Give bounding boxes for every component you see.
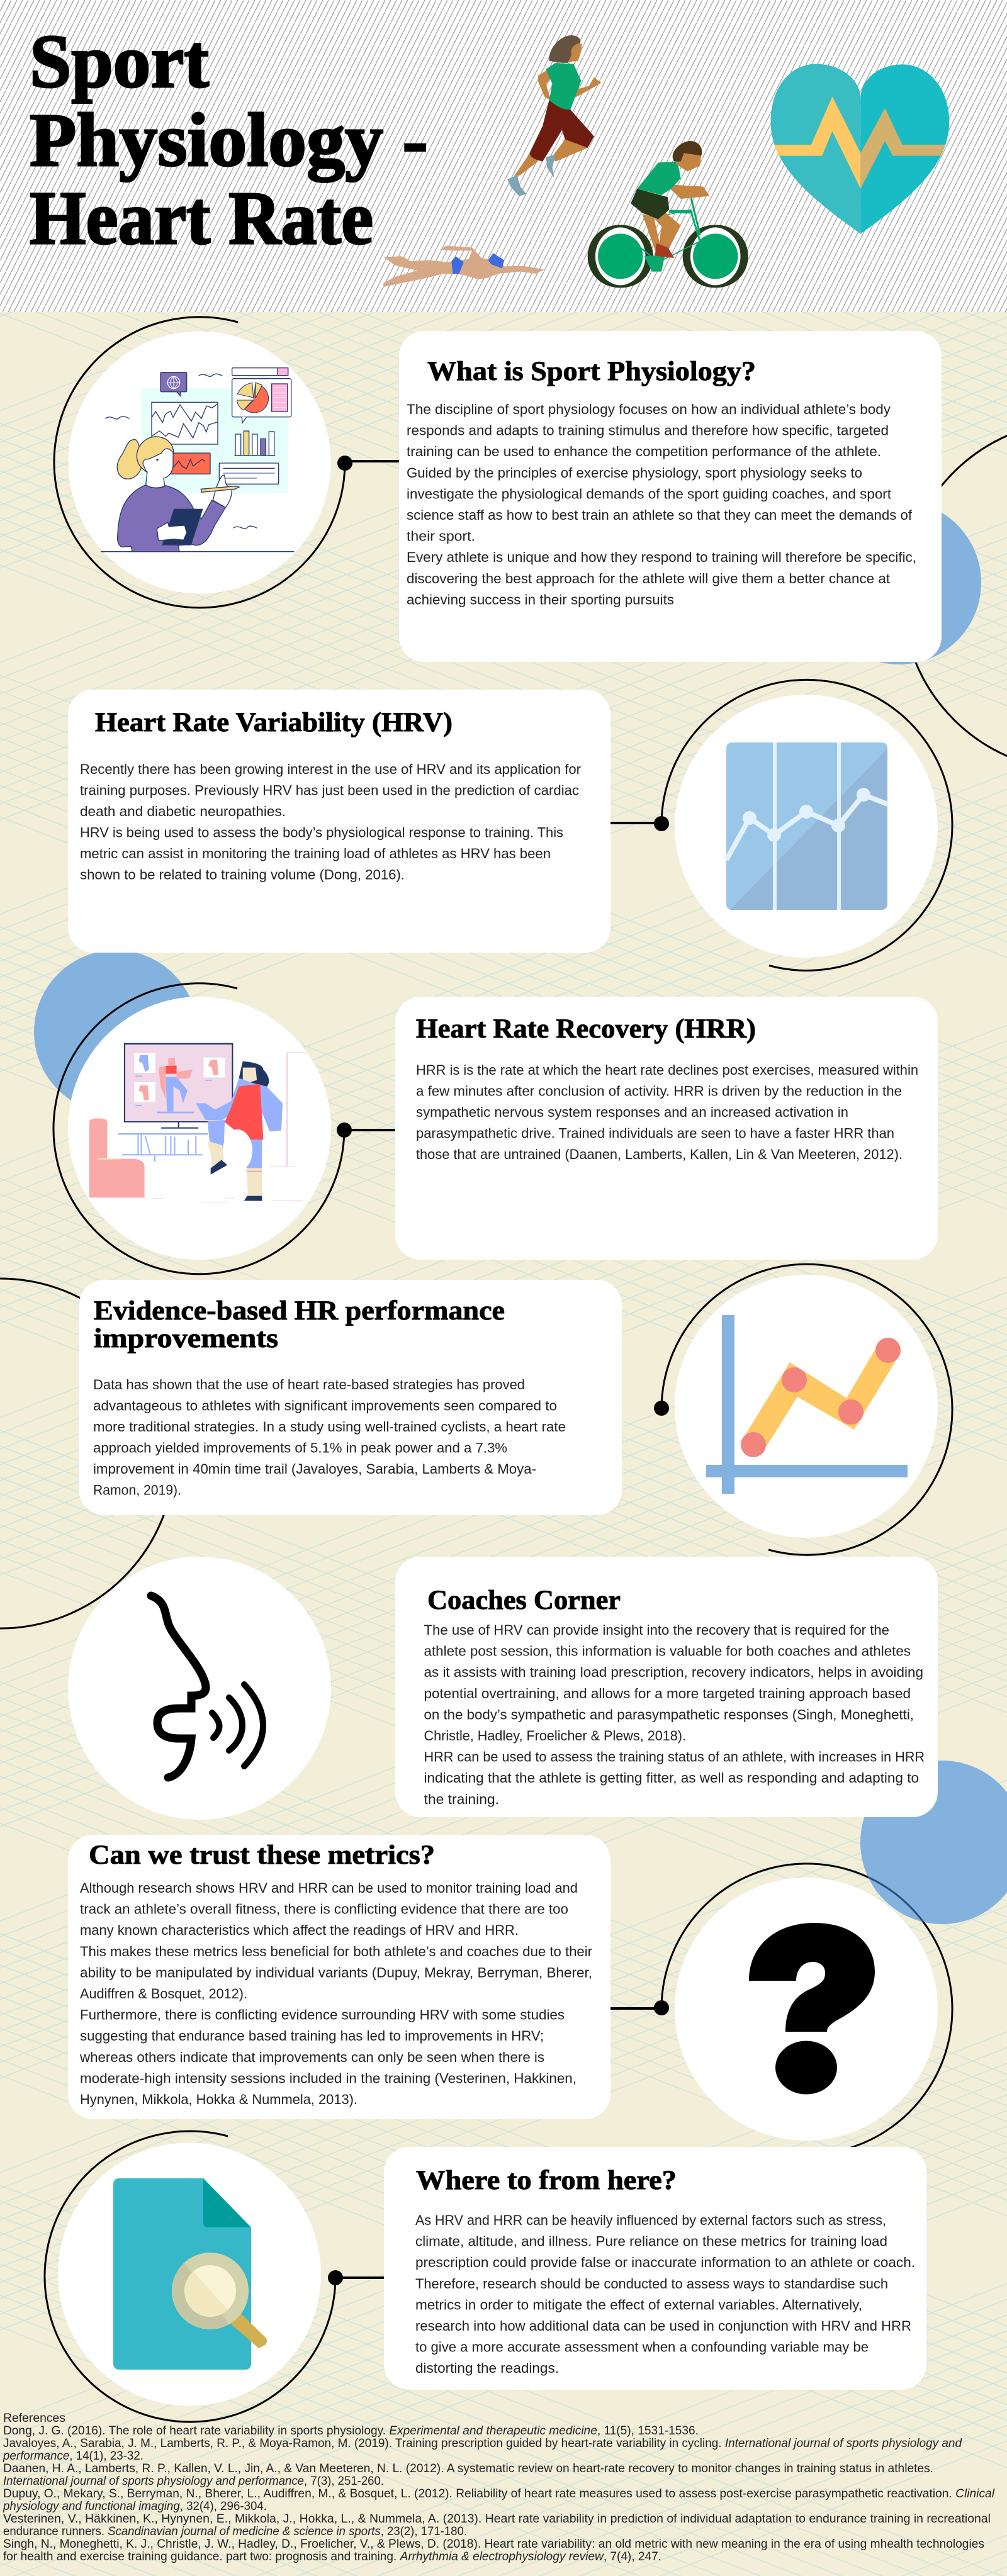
body text: HRV is being used to assess the body’s physiological response to training. This: [80, 824, 563, 841]
body text: Guided by the principles of exercise physiology, sport physiology seeks to: [407, 465, 862, 481]
body text: Although research shows HRV and HRR can be used to monitor training load and: [80, 1880, 578, 1896]
body text: Ramon, 2019).: [93, 1482, 181, 1498]
body text: training purposes. Previously HRV has just been used in the prediction of cardiac: [80, 783, 579, 798]
heading: Heart Rate Variability (HRV): [95, 708, 453, 737]
panel: heart rate recovery: [53, 983, 938, 1274]
card: [395, 1557, 938, 1817]
heading: Evidence-based HR performance: [94, 1296, 505, 1326]
body text: a few minutes after conclusion of activity. HRR is driven by the reduction in the: [416, 1084, 902, 1099]
ring with connector: [54, 317, 400, 608]
heading: Where to from here?: [416, 2166, 677, 2195]
body text: [93, 1377, 566, 1498]
decorative blue circle overlapping ring: [860, 1761, 1007, 1924]
body text: [80, 761, 581, 882]
body text: [407, 401, 916, 607]
illustration circle: document with magnifier: [58, 2143, 321, 2406]
body text: The use of HRV can provide insight into the recovery that is required for the: [424, 1622, 889, 1638]
card: [79, 1280, 622, 1515]
body text: investigate the physiological demands of the sport guiding coaches, and sport: [407, 486, 892, 501]
icon: cyclist: [592, 141, 745, 286]
body text: advantageous to athletes with significant improvements seen compared to: [93, 1398, 557, 1413]
panel: evidence-based improvements: [79, 1264, 952, 1555]
body text: Audiffren & Bosquet, 2012).: [80, 1986, 247, 2002]
decorative large ring left: [0, 1279, 175, 1628]
body text: approach yielded improvements of 5.1% in peak power and a 7.3%: [93, 1440, 507, 1456]
body text: training can be used to enhance the competition performance of the athlete.: [407, 444, 881, 459]
heading: Can we trust these metrics?: [89, 1840, 435, 1870]
heading: [94, 1296, 505, 1353]
body text: This makes these metrics less beneficial for both athlete’s and coaches due to their: [80, 1944, 592, 1959]
title: Sport: [30, 20, 209, 104]
body text: athlete post session, this information is valuable for both coaches and athletes: [424, 1644, 911, 1659]
heading: What is Sport Physiology?: [427, 357, 756, 386]
card: [399, 331, 942, 662]
body text: HRR can be used to assess the training status of an athlete, with increases in HRR: [424, 1749, 925, 1765]
body text: the training.: [424, 1791, 499, 1807]
references: [3, 2412, 995, 2563]
panel: where to from here: [45, 2131, 926, 2422]
references: Javaloyes, A., Sarabia, J. M., Lamberts, R. P., & Moya-Ramon, M. (2019). Training prescription guided by heart-rate variability in cycling. International journal of sports physiology and: [3, 2437, 962, 2450]
body text: on the body’s sympathetic and parasympathetic responses (Singh, Moneghetti,: [424, 1706, 914, 1722]
heading: Heart Rate Recovery (HRR): [416, 1014, 756, 1044]
body text: those that are untrained (Daanen, Lamberts, Kallen, Lin & Van Meeteren, 2012).: [416, 1146, 903, 1162]
illustration circle: speaking face: [68, 1557, 331, 1820]
body text: as it assists with training load prescription, recovery indicators, helps in avoiding: [424, 1664, 923, 1680]
references: physiology and functional imaging, 32(4), 296-304.: [3, 2500, 267, 2513]
decorative blue circle left: [34, 950, 198, 1114]
references: Daanen, H. A., Lamberts, R. P., Kallen, V. L., Jin, A., & Van Meeteren, N. L. (2012). A systematic review on heart-rate recovery to monitor changes in training status in athletes.: [3, 2462, 933, 2475]
body text: responds and adapts to training stimulus and therefore how specific, targeted: [407, 423, 889, 439]
title: Heart Rate: [30, 176, 373, 260]
illustration circle: woman exercising at screen: [68, 997, 331, 1260]
illustration circle: line chart tile: [675, 695, 938, 958]
body text: Recently there has been growing interest in the use of HRV and its application for: [80, 761, 581, 777]
icon: swimmer: [383, 246, 544, 287]
body text: Furthermore, there is conflicting evidence surrounding HRV with some studies: [80, 2007, 565, 2023]
body text: to give a more accurate assessment when a confounding variable may be: [415, 2339, 869, 2355]
icon: heart with pulse: [770, 64, 949, 234]
panel: heart rate variability: [68, 680, 952, 970]
heading: Coaches Corner: [427, 1586, 621, 1615]
body text: prescription could provide false or inaccurate information to an athlete or coach.: [415, 2254, 915, 2270]
ring with connector: [53, 983, 397, 1274]
references: Vesterinen, V., Häkkinen, K., Hynynen, E., Mikkola, J., Hokka, L., & Nummela, A. (2013). Heart rate variability in prediction of individual adaptation to endurance training in recreational: [3, 2512, 991, 2526]
body text: [416, 1062, 918, 1162]
body text: many known characteristics which affect the readings of HRV and HRR.: [80, 1922, 519, 1938]
heading: improvements: [94, 1324, 278, 1353]
panel: what is sport physiology: [54, 317, 942, 662]
decorative blue circle right top: [818, 501, 981, 664]
ring with connector: [45, 2131, 388, 2422]
body text: [424, 1622, 925, 1807]
panel: coaches corner: [68, 1557, 938, 1820]
body text: The discipline of sport physiology focuses on how an individual athlete’s body: [407, 401, 891, 417]
body text: death and diabetic neuropathies.: [80, 804, 286, 819]
title: [30, 20, 428, 260]
references: Dong, J. G. (2016). The role of heart rate variability in sports physiology. Experimental and therapeutic medicine, 11(5), 1531-1536.: [3, 2424, 699, 2438]
ring: [654, 1264, 952, 1555]
body text: [415, 2212, 915, 2376]
card: [384, 2147, 926, 2390]
ring with connector: [607, 680, 952, 970]
panel: can we trust these metrics: [68, 1761, 1007, 2154]
body text: potential overtraining, and allows for a more targeted training approach based: [424, 1686, 911, 1701]
body text: Christle, Hadley, Froelicher & Plews, 2018).: [424, 1728, 686, 1744]
body text: sympathetic nervous system responses and an increased activation in: [416, 1104, 848, 1120]
header band: [0, 0, 1007, 312]
body text: As HRV and HRR can be heavily influenced by external factors such as stress,: [415, 2212, 886, 2228]
body text: parasympathetic drive. Trained individuals are seen to have a faster HRR than: [416, 1125, 894, 1141]
title: Physiology -: [30, 98, 428, 182]
body text: HRR is is the rate at which the heart rate declines post exercises, measured within: [416, 1062, 918, 1078]
decorative large ring right: [903, 421, 1007, 771]
references: International journal of sports physiology and performance, 7(3), 251-260.: [3, 2475, 384, 2488]
body text: track an athlete’s overall fitness, there is conflicting evidence that there are too: [80, 1901, 568, 1917]
body text: moderate-high intensity sessions included in the training (Vesterinen, Hakkinen,: [80, 2070, 577, 2086]
card: [68, 1835, 610, 2119]
body text: research into how additional data can be used in conjunction with HRV and HRR: [415, 2318, 911, 2334]
body text: distorting the readings.: [415, 2360, 559, 2376]
body text: Therefore, research should be conducted to assess ways to standardise such: [415, 2276, 888, 2292]
ring with connector: [607, 1864, 952, 2154]
body text: Data has shown that the use of heart rate-based strategies has proved: [93, 1377, 525, 1392]
references: endurance runners. Scandinavian journal of medicine & science in sports, 23(2), 171-180.: [3, 2525, 467, 2538]
references: for health and exercise training guidance. part two: prognosis and training. Arrhythmia & electrophysiology review, 7(4), 247.: [3, 2550, 661, 2563]
body text: shown to be related to training volume (Dong, 2016).: [80, 867, 405, 882]
body text: whereas others indicate that improvements can only be seen when there is: [79, 2049, 544, 2065]
icon: runner: [507, 35, 601, 196]
body text: achieving success in their sporting pursuits: [407, 591, 674, 607]
card: [68, 690, 610, 953]
body text: Every athlete is unique and how they respond to training will therefore be specific,: [407, 549, 916, 565]
body text: indicating that the athlete is getting fitter, as well as responding and adapting to: [424, 1770, 919, 1786]
references: References: [3, 2412, 65, 2425]
body text: improvement in 40min time trail (Javaloyes, Sarabia, Lamberts & Moya-: [93, 1461, 536, 1477]
illustration circle: woman with charts: [68, 331, 331, 594]
card: [395, 997, 938, 1260]
illustration circle: line graph: [675, 1275, 938, 1538]
body text: [79, 1880, 592, 2107]
body text: their sport.: [407, 529, 475, 544]
body text: metrics in order to mitigate the effect of external variables. Alternatively,: [415, 2297, 862, 2312]
references: Dupuy, O., Mekary, S., Berryman, N., Bherer, L., Audiffren, M., & Bosquet, L. (2012). Reliability of heart rate measures used to assess post-exercise parasympathetic reactivation. Clinical: [3, 2487, 995, 2500]
body text: science staff as how to best train an athlete so that they can meet the demands of: [407, 507, 913, 523]
body text: ability to be manipulated by individual variants (Dupuy, Mekray, Berryman, Bherer,: [80, 1964, 592, 1980]
body text: suggesting that endurance based training has led to improvements in HRV;: [80, 2028, 544, 2044]
body text: climate, altitude, and illness. Pure reliance on these metrics for training load: [415, 2234, 887, 2249]
body text: Hynynen, Mikkola, Hokka & Nummela, 2013).: [80, 2092, 357, 2107]
references: performance, 14(1), 23-32.: [3, 2450, 143, 2463]
body text: metric can assist in monitoring the training load of athletes as HRV has been: [80, 846, 551, 861]
illustration circle: question mark: [675, 1878, 938, 2141]
references: Singh, N., Moneghetti, K. J., Christle, J. W., Hadley, D., Froelicher, V., & Plews, D. (2018). Heart rate variability: an old metric with new meaning in the era of using mhealth technologies: [3, 2538, 984, 2551]
body text: more traditional strategies. In a study using well-trained cyclists, a heart rate: [93, 1419, 566, 1435]
body text: discovering the best approach for the athlete will give them a better chance at: [407, 571, 891, 586]
